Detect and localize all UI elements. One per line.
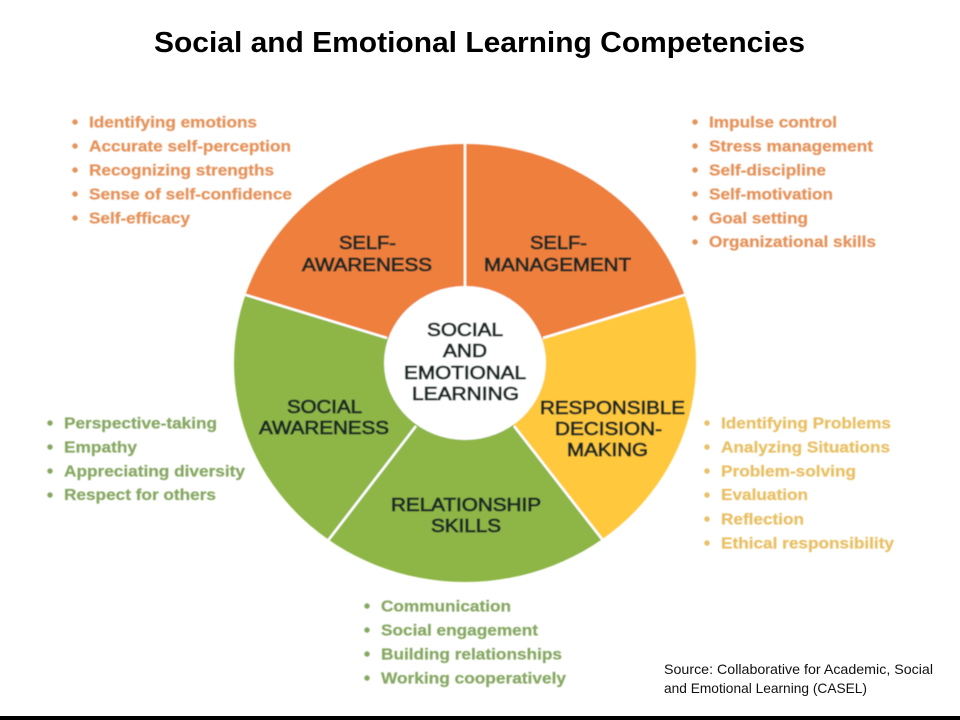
label: responsible decision-making: MAKING: [567, 439, 648, 460]
list: relationship skills competencies: Social engagement: [381, 622, 539, 640]
list: responsible decision-making competencies: Analyzing Situations: [721, 440, 890, 456]
label: center hub text: [404, 319, 526, 404]
list: responsible decision-making competencies: [704, 416, 894, 552]
label: self-management: MANAGEMENT: [484, 254, 631, 275]
label: relationship skills: [391, 494, 541, 536]
list: self-awareness competencies: Recognizing strengths: [89, 162, 274, 180]
label: responsible decision-making: DECISION-: [555, 418, 662, 439]
label: center hub text: SOCIAL: [427, 319, 503, 340]
list: self-management competencies: Self-motivation: [709, 186, 833, 204]
list: social awareness competencies: Empathy: [64, 440, 137, 456]
segment: self-management: [466, 143, 685, 339]
label: center hub text: LEARNING: [412, 383, 519, 404]
list: responsible decision-making competencies: Ethical responsibility: [721, 536, 894, 552]
list: responsible decision-making competencies: Evaluation: [721, 487, 808, 504]
list: social awareness competencies: Appreciating diversity: [64, 464, 245, 480]
list: self-awareness competencies: Sense of self-confidence: [89, 186, 292, 204]
list: self-management competencies: Goal setting: [709, 210, 808, 228]
label: relationship skills: SKILLS: [431, 515, 501, 536]
list: self-management competencies: Self-discipline: [709, 162, 826, 180]
source note: [664, 661, 933, 696]
segment: responsible decision-making: [512, 295, 697, 540]
segment: self-awareness: [245, 143, 464, 339]
wheel diagram: [233, 143, 697, 583]
list: self-awareness competencies: [72, 114, 292, 228]
list: self-management competencies: Impulse control: [709, 114, 837, 132]
list: self-awareness competencies: Self-efficacy: [89, 210, 190, 228]
source note: and Emotional Learning (CASEL): [664, 680, 867, 696]
list: relationship skills competencies: [364, 598, 566, 688]
label: social awareness: SOCIAL: [287, 396, 362, 417]
label: responsible decision-making: RESPONSIBLE: [540, 397, 685, 418]
label: self-awareness: SELF-: [339, 232, 396, 253]
list: self-management competencies: Organizational skills: [709, 234, 876, 251]
label: center hub text: AND: [443, 340, 487, 361]
label: social awareness: [259, 396, 389, 438]
center hub: [384, 286, 546, 440]
segment: social awareness: [233, 295, 418, 540]
segment: relationship skills: [329, 424, 602, 583]
list: responsible decision-making competencies: Problem-solving: [721, 464, 856, 480]
label: self-management: SELF-: [530, 232, 587, 253]
list: self-awareness competencies: Accurate self-perception: [89, 138, 291, 156]
label: center hub text: EMOTIONAL: [404, 362, 526, 383]
list: self-management competencies: [692, 114, 876, 251]
list: self-awareness competencies: Identifying emotions: [89, 114, 257, 132]
label: responsible decision-making: [540, 397, 685, 460]
label: self-management: [484, 232, 631, 275]
bottom black bar: [0, 716, 960, 720]
list: relationship skills competencies: Building relationships: [381, 646, 562, 664]
list: responsible decision-making competencies: Identifying Problems: [721, 416, 891, 432]
list: relationship skills competencies: Communication: [381, 598, 511, 616]
label: social awareness: AWARENESS: [259, 417, 389, 438]
list: social awareness competencies: Perspective-taking: [64, 416, 217, 432]
source note: Source: Collaborative for Academic, Social: [664, 661, 933, 677]
list: social awareness competencies: Respect for others: [64, 487, 216, 504]
label: self-awareness: [302, 232, 432, 275]
list: responsible decision-making competencies: Reflection: [721, 512, 804, 528]
title: Social and Emotional Learning Competencies: [154, 27, 805, 59]
wheel segments: [233, 143, 697, 583]
label: relationship skills: RELATIONSHIP: [391, 494, 541, 515]
list: relationship skills competencies: Working cooperatively: [381, 670, 566, 688]
label: self-awareness: AWARENESS: [302, 254, 432, 275]
list: social awareness competencies: [47, 416, 245, 504]
list: self-management competencies: Stress management: [709, 138, 874, 156]
